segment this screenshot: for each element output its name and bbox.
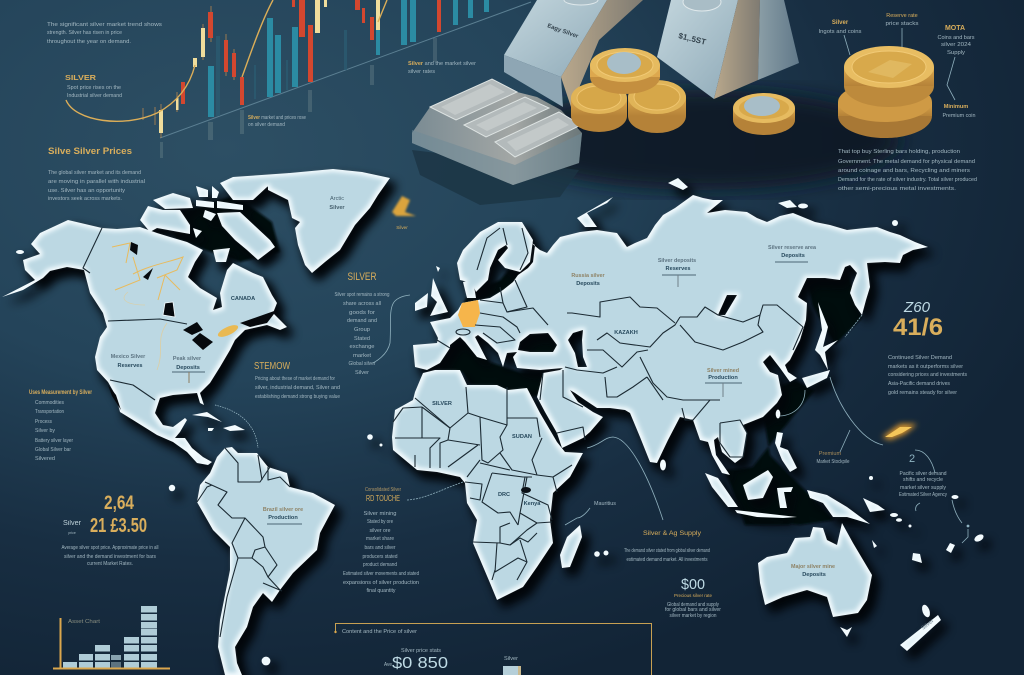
callouts: coin stack labels: Ingots and coins (818, 29, 862, 35)
gold mark near great lakes (216, 323, 240, 339)
callout: right price: considering prices and investments (888, 372, 967, 378)
map labels (111, 196, 935, 632)
illustration: big gold coin stack (838, 46, 934, 138)
list: uses of silver: Silver by (35, 428, 55, 434)
callout: silver label: demand and (347, 318, 377, 324)
map labels: Reserves (118, 363, 142, 369)
dashed route across caribbean (215, 405, 258, 448)
callouts: coin stack labels (818, 13, 976, 119)
chart label: silver price (65, 75, 122, 99)
icon: gold burst (882, 424, 917, 440)
map labels: Reserves (666, 266, 690, 272)
land: alaska islands and arctic (16, 173, 382, 665)
map labels: Mexico Silver (111, 354, 146, 360)
callout: right price: gold remains steady for silver (888, 390, 957, 396)
land: scandinavia (457, 222, 533, 292)
callout: silver label: Global silver (348, 361, 376, 367)
callout: madagascar: Mauritius (594, 501, 616, 507)
callout: silver label: Stated (354, 336, 370, 342)
world map (2, 169, 985, 675)
land: australia (758, 523, 872, 617)
panel: bottom price box: Content and the Price of silver (342, 629, 417, 635)
stat: $00 (665, 576, 721, 619)
callout: right price: Asia-Pacific demand drives (888, 381, 950, 387)
callout: central africa: bars and silver (364, 545, 396, 551)
text block: bullion description: other semi-precious metal investments. (838, 186, 957, 192)
map labels: Silver mined (707, 368, 739, 374)
land: southeast asia islands (705, 432, 912, 528)
stat: $00: Global demand and supply (667, 602, 719, 608)
callout: pacific text: shifts and recycle (903, 477, 943, 483)
stat: $00: Precious silver rate (674, 593, 712, 598)
text block: chart intro: The significant silver market trend shows (47, 22, 162, 28)
illustration: tall silver bar left: Eagy Silver (546, 23, 579, 40)
land: greenland (268, 169, 390, 273)
country borders (83, 228, 803, 637)
callout: stemow: STEMOW (254, 361, 290, 372)
callouts: coin stack labels: Reserve rate (886, 13, 918, 19)
callout: right price: 41/6 (893, 314, 943, 341)
list: uses of silver: Silvered (35, 456, 55, 462)
stat: left price: current Market Rates. (87, 561, 133, 567)
gold burst near Greenland (392, 196, 416, 230)
chart label: silver price: SILVER (65, 75, 96, 82)
map labels: Silver reserve area (768, 245, 817, 251)
chart label: middle (248, 115, 306, 128)
text block: bullion description: around coinage and bars, Recycling and miners (838, 168, 970, 174)
chart label: middle: on silver demand (248, 122, 285, 128)
callout: pacific text: Pacific silver demand (900, 471, 946, 477)
map labels: Major silver mine (791, 564, 835, 570)
map labels: Kenya (524, 501, 541, 507)
callout: central africa: Estimated silver movements and stated (343, 571, 419, 577)
callouts: coin stack labels: Coins and bars (938, 35, 975, 41)
land: uk ireland iceland denmark (415, 266, 476, 316)
stat: $00: silver market by region (670, 613, 716, 619)
callout: pacific text: 2 (909, 453, 915, 465)
stat: left price: price (68, 531, 76, 535)
illustration: silver ingots (412, 79, 582, 205)
text block: chart intro (47, 22, 162, 45)
callout: silver label: SILVER (348, 271, 377, 283)
chart label: middle: Silver market and prices rose (248, 115, 306, 121)
land: eurasia (413, 195, 928, 475)
land: south america (197, 447, 335, 675)
callout: stemow (254, 361, 340, 400)
illustration: gold coin pile (571, 48, 686, 133)
illustration: single gold coin (733, 93, 795, 135)
map labels: CANADA (231, 296, 255, 302)
chart label: silver price: Industrial silver demand (67, 93, 122, 99)
dark gaps inside north america (108, 242, 277, 410)
list: uses of silver: Uses Measurement by Silver (29, 389, 92, 396)
callout: silver label: Silver spot remains a strong (334, 292, 390, 298)
stat: left price (62, 493, 158, 567)
map labels: KAZAKH (614, 330, 638, 336)
list: uses of silver: Process (35, 419, 52, 425)
callout: right price: Continued Silver Demand (888, 355, 952, 361)
callouts: coin stack labels: Minimum (944, 104, 968, 110)
land: japan and sakhalin (802, 302, 838, 388)
text block: silver prices: The global silver market and its demand (48, 170, 141, 176)
stat: left price: 21 £3.50 (90, 515, 147, 537)
callout: stemow: Pricing about these of market demand for (255, 376, 335, 382)
map labels: Silver (329, 205, 345, 211)
panel: bottom price box: $0 850 (392, 655, 448, 672)
callout: silver label: goods for (349, 310, 375, 316)
stat: left price: Silver (63, 520, 82, 527)
callout: central africa: silver ore (370, 528, 390, 534)
germany highlight (458, 300, 480, 327)
map labels: Production (268, 515, 298, 521)
callout: central africa: product demand (363, 562, 397, 568)
leader lines: east asia (780, 315, 883, 452)
map labels: Russia silver (571, 273, 606, 279)
panel: bottom price box (334, 624, 652, 675)
callout: central africa (343, 482, 463, 594)
callout: pacific label: Market Stockpile (816, 459, 850, 465)
map labels: DRC (498, 492, 510, 498)
text block: silver prices (48, 170, 145, 202)
callout: central africa: final quantity (366, 588, 396, 594)
callout: pacific label (816, 451, 850, 465)
callout: pacific text: market silver supply (900, 485, 946, 491)
land: tasmania new zealand pacific islands (840, 495, 985, 651)
map labels: SILVER (432, 401, 452, 407)
callout: central africa: Silver mining (364, 511, 396, 517)
panel: bottom price box: Ave (384, 662, 392, 668)
illustration: tall silver bar right (657, 0, 799, 99)
curve: arabian sea leader (587, 437, 663, 520)
map labels: Deposits (176, 365, 200, 371)
callout: madagascar (565, 501, 616, 525)
callout: pacific text (899, 450, 969, 543)
callouts: coin stack labels: Silver (832, 20, 849, 26)
stat: $00: for global bars and silver (665, 607, 721, 613)
callout: silver supply: The demand silver stated from global silver demand (624, 548, 710, 554)
bar chart: asset chart (53, 606, 170, 668)
callouts: coin stack labels: MOTA (945, 25, 965, 32)
callout: silver label (334, 271, 410, 376)
callout: stemow: silver, industrial demand, Silver and (255, 385, 340, 391)
callout: pacific label: Premium (819, 451, 842, 457)
land: africa (392, 370, 583, 600)
chart label: right (408, 61, 476, 75)
callout: central africa: expansions of silver production (343, 580, 419, 586)
list: uses of silver: Transportation (35, 409, 64, 415)
list: uses of silver: Battery silver layer (35, 438, 73, 444)
map labels: Brazil silver ore (263, 507, 303, 513)
callouts: coin stack labels: Supply (947, 50, 965, 56)
list: uses of silver: Commodities (35, 400, 64, 406)
text block: chart intro: strength. Silver has risen in price (47, 30, 122, 36)
illustration: tall silver bar right: $1,.5ST (678, 31, 707, 47)
text block: silver prices: are moving in parallel with industrial (48, 179, 145, 185)
callout: central africa: market share (366, 536, 394, 542)
heading: silver prices: Silve Silver Prices (48, 146, 132, 156)
gold route scribbles on north america (112, 243, 183, 370)
stat: $00: $00 (681, 576, 705, 593)
chart label: right: Silver and the market silver (408, 61, 476, 67)
list: uses of silver: Global Silver bar (35, 447, 71, 453)
chart label: right: silver rates (408, 69, 435, 75)
lake victoria (521, 487, 531, 493)
text block: chart intro: throughout the year on demand. (47, 39, 131, 45)
callout: central africa: producers stated (362, 554, 398, 560)
callout: silver supply: Silver & Ag Supply (643, 530, 702, 537)
land: north america (2, 220, 287, 465)
callout: right price: Z60 (903, 299, 931, 316)
map labels: Production (708, 375, 738, 381)
callout: silver label: market (353, 353, 371, 359)
callout: silver label: Silver (355, 370, 369, 376)
text block: bullion description: Demand for the rate of silver industry. Total silver produced (838, 177, 977, 183)
callout: silver label: exchange (350, 344, 374, 350)
map labels: Deposits (781, 253, 805, 259)
list: uses of silver (29, 389, 92, 462)
text block: silver prices: investors seek across markets. (48, 196, 122, 202)
stat: left price: silver and the demand investment for bars (64, 554, 156, 560)
callout: stemow: establishing demand strong buying value (255, 394, 340, 400)
callout: central africa: Consolidated Silver (365, 487, 401, 493)
text block: bullion description: Government. The metal demand for physical demand (838, 159, 975, 165)
map labels: Peak silver (173, 356, 202, 362)
dark seas behind land (175, 195, 862, 525)
callout: central africa: RD TOUCHE (366, 494, 400, 503)
callouts: coin stack labels: price stacks (886, 21, 919, 27)
callout: right price: markets as it outperforms silver (888, 364, 963, 370)
map labels: Deposits (802, 572, 826, 578)
panel: bottom price box: Silver price stats (401, 648, 441, 654)
callout: silver label: share across all (343, 301, 381, 307)
text block: bullion description (838, 149, 977, 192)
callouts: coin stack labels: silver 2024 (941, 42, 971, 48)
gold burst near Greenland: Silver (396, 225, 408, 230)
bar chart: asset chart: Asset Chart (68, 619, 100, 625)
land: madagascar and indian ocean islands (560, 410, 780, 568)
callout: silver label: Group (354, 327, 370, 333)
callout: pacific text: Estimated Silver Agency (899, 492, 947, 498)
chart label: silver price: Spot price rises on the (67, 85, 121, 91)
map labels: Silver deposits (658, 258, 696, 264)
callouts: coin stack labels: Premium coin (942, 113, 976, 119)
shadow under bullion (500, 90, 900, 190)
panel: bottom price box: Silver (504, 656, 518, 662)
map labels: Arctic (330, 196, 344, 202)
map labels: Deposits (576, 281, 600, 287)
stat: left price: 2,64 (104, 493, 134, 514)
text block: silver prices: use. Silver has an opportunity (48, 188, 125, 194)
map labels: Silver (921, 618, 935, 632)
illustration: tall silver bar left (504, 0, 643, 107)
callout: silver supply (624, 530, 710, 563)
callout: central africa: Stated by ore (367, 519, 393, 525)
callout: right price (888, 299, 967, 396)
land: arctic russia islands (577, 178, 898, 227)
stat: left price: Average silver spot price. Approximate price in all (62, 545, 158, 551)
text block: bullion description: That top buy Sterling bars holding, production (838, 149, 960, 155)
map labels: SUDAN (512, 434, 532, 440)
callout: silver supply: estimated demand market. All investments (626, 557, 708, 563)
candlestick chart (66, 0, 531, 158)
